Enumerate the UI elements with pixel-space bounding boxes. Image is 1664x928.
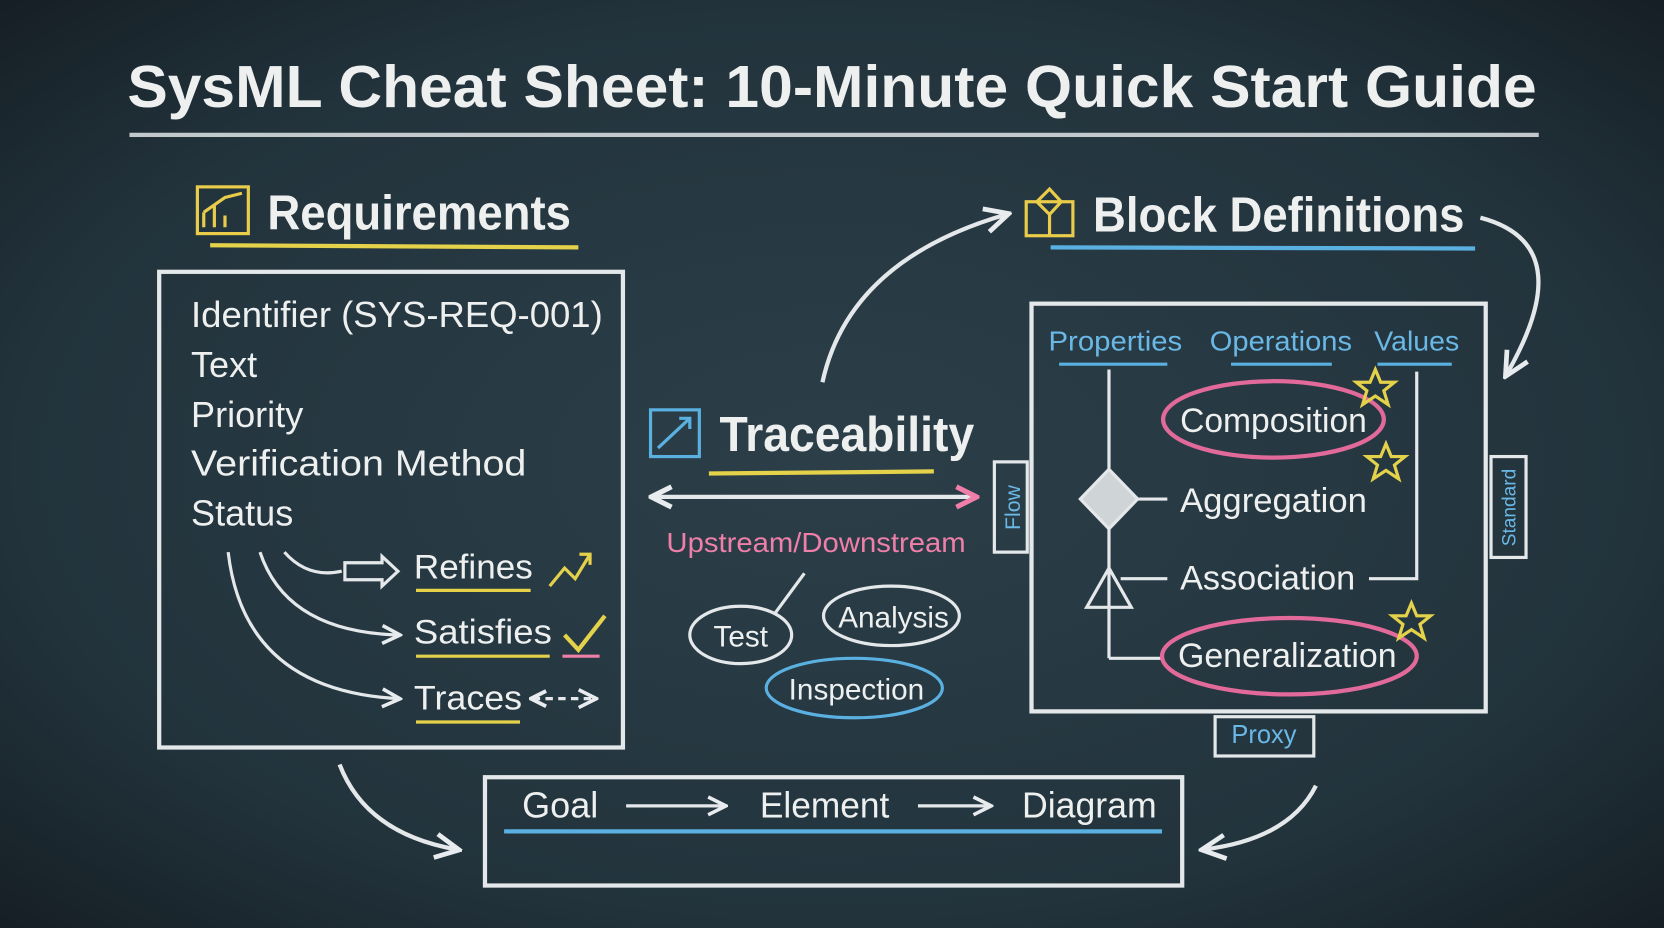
tab: standard — [1491, 457, 1526, 557]
panel: workflow goal element diagram: Element — [760, 785, 889, 826]
panel: workflow goal element diagram: Diagram — [1022, 785, 1157, 826]
tab: standard: Standard — [1499, 469, 1520, 546]
arrows into workflow — [340, 764, 456, 849]
column headers: Properties — [1048, 325, 1182, 356]
panel: block definitions — [1032, 304, 1486, 711]
tab: flow — [994, 462, 1027, 552]
relationships: Traces — [414, 679, 522, 717]
panel: block definitions: Generalization — [1178, 637, 1397, 675]
icon: chart — [197, 187, 248, 234]
attributes list — [191, 294, 603, 534]
icon: stars — [1356, 370, 1431, 638]
heading: traceability: Traceability — [720, 408, 974, 462]
icon: block — [1026, 189, 1073, 236]
panel: block definitions: Aggregation — [1180, 482, 1367, 520]
relationships — [228, 549, 605, 722]
heading: requirements: Requirements — [267, 186, 571, 240]
arrow: upstream/downstream: Upstream/Downstream — [666, 527, 966, 558]
panel: requirements — [159, 272, 623, 747]
column headers: Operations — [1210, 325, 1352, 356]
attributes list: Identifier (SYS-REQ-001) — [191, 294, 603, 335]
tab: flow: Flow — [1002, 484, 1025, 530]
icon: trace arrow — [651, 410, 699, 457]
verification bubbles — [690, 573, 959, 718]
panel: block definitions: Composition — [1180, 402, 1367, 440]
panel: workflow goal element diagram — [485, 777, 1182, 886]
arrow: traceability to blocks — [822, 214, 1006, 382]
attributes list: Status — [191, 493, 293, 534]
attributes list: Priority — [191, 394, 303, 435]
panel: block definitions: Association — [1180, 559, 1355, 597]
relationship tree — [1080, 370, 1417, 658]
tab: proxy — [1215, 717, 1314, 756]
tab: proxy: Proxy — [1231, 721, 1297, 749]
column headers — [1048, 325, 1459, 364]
heading: requirements — [197, 186, 578, 247]
heading: traceability — [651, 408, 974, 474]
heading: block definitions: Block Definitions — [1093, 188, 1464, 242]
relationships: Satisfies — [414, 613, 552, 651]
verification bubbles: Test — [713, 621, 769, 654]
title: SysML Cheat Sheet: 10-Minute Quick Start Guide — [127, 53, 1537, 120]
verification bubbles: Analysis — [838, 602, 949, 635]
column headers: Values — [1374, 325, 1459, 356]
verification bubbles: Inspection — [789, 674, 924, 707]
relationships: Refines — [414, 549, 533, 587]
attributes list: Verification Method — [191, 443, 526, 484]
panel: workflow goal element diagram: Goal — [522, 785, 598, 826]
attributes list: Text — [191, 344, 257, 385]
arrow: blocks curve — [1480, 218, 1538, 374]
